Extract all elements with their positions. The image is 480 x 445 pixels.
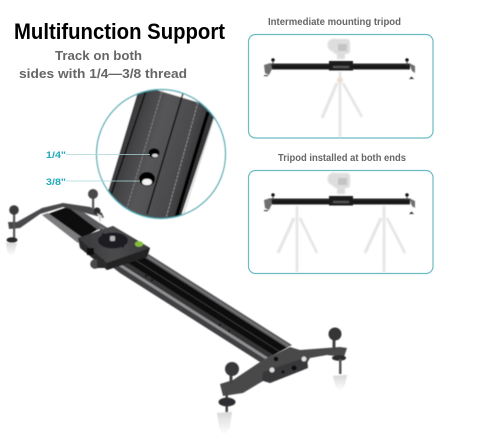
- subtitle: Track on both: [55, 48, 142, 63]
- heading: tripod installed at both ends: Tripod installed at both ends: [278, 153, 406, 164]
- callout labels: 3/8": [46, 177, 66, 188]
- heading: intermediate mounting tripod: Intermediate mounting tripod: [268, 17, 401, 28]
- slider: [264, 193, 415, 214]
- zoom callout: track detail circle: [96, 85, 226, 225]
- rail: [99, 223, 292, 362]
- subtitle: [19, 48, 187, 81]
- holes: [139, 148, 160, 186]
- panel: tripod installed at both ends: [248, 170, 433, 274]
- callout labels: [46, 150, 150, 188]
- near end bracket: [217, 328, 347, 433]
- panel: intermediate mounting tripod: [248, 34, 433, 138]
- icon: faded tripods: [278, 206, 405, 272]
- icon: faded camera: [328, 172, 350, 194]
- far end bracket: [6, 189, 104, 255]
- title: Multifunction Support: [14, 19, 226, 44]
- main camera slider product: [6, 189, 347, 433]
- slider: [264, 58, 415, 79]
- carriage plate: [78, 226, 150, 270]
- icon: faded tripod: [322, 72, 362, 137]
- far rail section: [42, 206, 104, 243]
- callout labels: 1/4": [46, 150, 66, 161]
- subtitle: sides with 1/4—3/8 thread: [19, 66, 187, 81]
- icon: faded camera: [328, 38, 350, 59]
